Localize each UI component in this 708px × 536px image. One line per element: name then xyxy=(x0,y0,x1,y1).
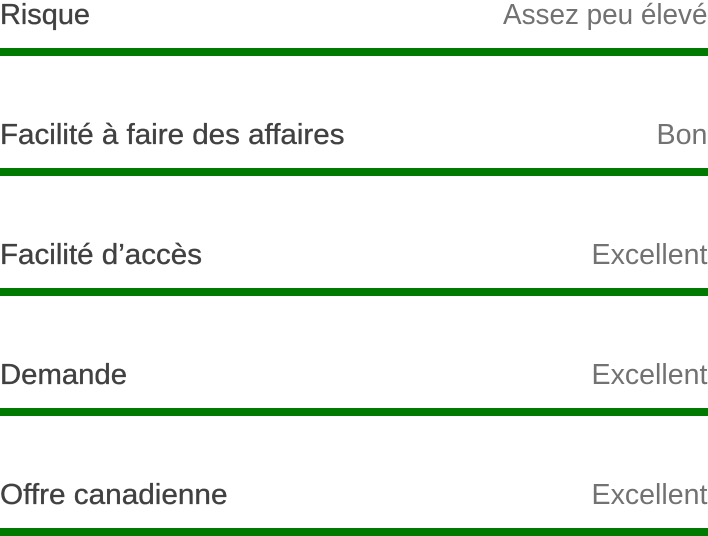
value: Excellent: Excellent xyxy=(592,359,708,391)
value: Excellent: Excellent xyxy=(592,239,708,271)
row: Facilité d'accès xyxy=(0,239,708,296)
row: Offre canadienne xyxy=(0,479,708,536)
label: Facilité à faire des affaires: Facilité à faire des affaires xyxy=(0,119,344,151)
label: Facilité d'accès: Facilité d’accès xyxy=(0,239,202,271)
label: Demande: Demande xyxy=(0,359,127,391)
value: Bon: Bon xyxy=(656,119,708,151)
green bar: Facilité à faire des affaires xyxy=(0,168,708,176)
label: Offre canadienne: Offre canadienne xyxy=(0,479,228,511)
row: Risque xyxy=(0,0,708,56)
row: Demande xyxy=(0,359,708,416)
green bar: Risque xyxy=(0,48,708,56)
green bar: Facilité d'accès xyxy=(0,288,708,296)
row: Facilité à faire des affaires xyxy=(0,119,708,176)
value: Excellent: Excellent xyxy=(592,479,708,511)
green bar: Demande xyxy=(0,408,708,416)
green bar: Offre canadienne xyxy=(0,528,708,536)
